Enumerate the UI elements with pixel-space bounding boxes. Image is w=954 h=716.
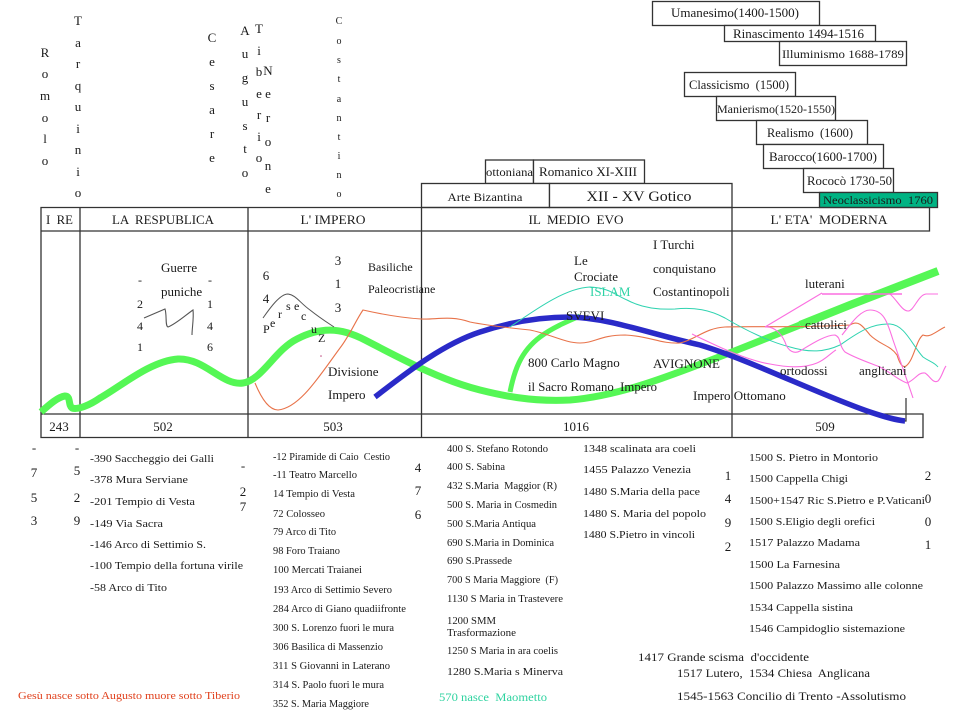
empire monuments list: 98 Foro Traiano: [273, 546, 340, 557]
Guerre puniche squiggle: [144, 309, 193, 335]
modern monuments list: 1500 S.Eligio degli orefici: [749, 516, 875, 528]
art movement boxes, upper group: Umanesimo(1400-1500): [671, 5, 799, 20]
period headings: L' ETA' MODERNA: [770, 212, 888, 227]
religious events notes: 1545-1563 Concilio di Trento -Assolutismo: [677, 689, 906, 703]
empire monuments list: 314 S. Paolo fuori le mura: [273, 680, 385, 691]
republic monuments list: -58 Arco di Tito: [90, 582, 168, 594]
republic monuments list: -201 Tempio di Vesta: [90, 496, 195, 508]
medieval churches list: 1280 S.Maria s Minerva: [447, 666, 563, 678]
late medieval and renaissance works: [583, 443, 707, 541]
art movement boxes, lower group: Barocco(1600-1700): [769, 149, 877, 164]
period durations: 243: [49, 419, 69, 434]
label: Persecuzioni: 313: [335, 253, 341, 315]
art movement boxes, lower group: [684, 72, 938, 208]
period headings: I RE: [46, 212, 73, 227]
labels: confessions: [780, 276, 907, 378]
ruler names in vertical lettering: Tarquinio: [74, 13, 82, 200]
small orange dot: [320, 355, 322, 357]
modern monuments list: 1534 Cappella sistina: [749, 602, 853, 614]
empire monuments list: -12 Piramide di Caio Cestio: [273, 452, 390, 463]
label: Guerre puniche: puniche: [161, 284, 202, 299]
label: Guerre puniche: -241: [137, 273, 143, 354]
label: I Turchi: I Turchi: [653, 237, 695, 252]
art movement boxes, upper group: [652, 2, 906, 66]
label: Persecuzioni: PersecuZ: [263, 299, 325, 345]
period durations: 503: [323, 419, 343, 434]
empire monuments list: 14 Tempio di Vesta: [273, 489, 356, 500]
medieval churches list: 700 S Maria Maggiore (F): [447, 575, 558, 586]
medieval churches list: 690 S.Prassede: [447, 556, 513, 567]
black end tick: [895, 398, 906, 421]
late medieval and renaissance works: 1480 S.Pietro in vincoli: [583, 529, 695, 541]
modern monuments list: 1500+1547 Ric S.Pietro e P.Vaticani: [749, 495, 925, 507]
label: Le Crociate: Le: [574, 253, 588, 268]
medieval churches list: 690 S.Maria in Dominica: [447, 538, 555, 549]
label: Basiliche Paleocristiane: Paleocristiane: [368, 282, 435, 296]
period durations: 509: [815, 419, 835, 434]
labels: confessions: anglicani: [859, 363, 907, 378]
modern monuments list: 1500 Cappella Chigi: [749, 473, 848, 485]
label: ISLAM: ISLAM: [590, 284, 631, 299]
republic monuments list: -390 Saccheggio dei Galli: [90, 453, 214, 465]
art movement boxes, upper group: Illuminismo 1688-1789: [782, 47, 904, 61]
label: Avignone: AVIGNONE: [653, 356, 720, 371]
empire start and end dates: [240, 458, 422, 522]
label: Carlo Magno: [528, 355, 657, 394]
empire monuments list: 311 S Giovanni in Laterano: [273, 661, 390, 672]
modern monuments list: 1500 S. Pietro in Montorio: [749, 452, 879, 464]
period durations: [49, 419, 835, 434]
ruler names in vertical lettering: [40, 13, 343, 200]
late medieval and renaissance works: 1480 S. Maria del popolo: [583, 508, 707, 520]
art movement boxes, lower group: Rococò 1730-50: [807, 173, 892, 188]
empire monuments list: 100 Mercati Traianei: [273, 565, 362, 576]
labels: confessions: ortodossi: [780, 363, 828, 378]
medieval churches list: 500 S. Maria in Cosmedin: [447, 500, 557, 511]
art movement boxes, lower group: Neoclassicismo 1760: [823, 193, 933, 207]
medieval churches list: Trasformazione: [447, 628, 517, 639]
modern monuments list: 1546 Campidoglio sistemazione: [749, 623, 905, 635]
ruler names in vertical lettering: Nerone: [263, 63, 273, 196]
medieval art boxes: Romanico XI-XIII: [539, 164, 637, 179]
label: Divisione Impero: Divisione: [328, 364, 379, 379]
label: Guerre puniche: [137, 260, 213, 354]
label: Impero Ottomano: Impero Ottomano: [693, 388, 786, 403]
empire monuments list: 352 S. Maria Maggiore: [273, 699, 370, 710]
modern age start and end dates: 2001: [925, 468, 931, 552]
period headings: [46, 212, 888, 227]
ruler names in vertical lettering: Costantino: [336, 16, 343, 200]
labels: confessions: luterani: [805, 276, 845, 291]
republic monuments list: -100 Tempio della fortuna virile: [90, 560, 243, 572]
cyan curve: [510, 287, 938, 367]
timeline table: [41, 208, 930, 438]
pink curves: [692, 293, 946, 398]
empire monuments list: 72 Colosseo: [273, 509, 325, 520]
late medieval and renaissance works: 1348 scalinata ara coeli: [583, 443, 696, 455]
art movement boxes, lower group: Realismo (1600): [767, 125, 853, 140]
label: Persecuzioni: [263, 253, 341, 345]
art movement boxes, lower group: Classicismo (1500): [689, 77, 789, 92]
label: SVEVI: SVEVI: [566, 308, 604, 323]
note: Gesù: Gesù nasce sotto Augusto muore sotto Tiberio: [18, 690, 241, 702]
modern age start and end dates: 1492: [725, 468, 732, 554]
modern age start and end dates: [725, 468, 931, 554]
modern monuments list: 1500 La Farnesina: [749, 559, 840, 571]
label: Persecuzioni: 64: [263, 268, 270, 306]
republic monuments list: -146 Arco di Settimio S.: [90, 539, 206, 551]
orange curve: [255, 310, 945, 410]
medieval art boxes: XII - XV Gotico: [586, 189, 692, 205]
label: I Turchi: [653, 237, 730, 299]
label: Carlo Magno: il Sacro Romano Impero: [528, 379, 657, 394]
empire monuments list: 193 Arco di Settimio Severo: [273, 585, 392, 596]
empire start and end dates: -27: [240, 458, 247, 514]
label: I Turchi: conquistano: [653, 261, 716, 276]
label: Le Crociate: [574, 253, 618, 284]
period headings: LA RESPUBLICA: [112, 212, 215, 227]
ruler names in vertical lettering: Romolo: [40, 45, 50, 168]
kings dates: -529: [74, 440, 80, 528]
kings dates: [31, 440, 80, 528]
empire monuments list: 300 S. Lorenzo fuori le mura: [273, 623, 395, 634]
label: Carlo Magno: 800 Carlo Magno: [528, 355, 620, 370]
period durations: 502: [153, 419, 173, 434]
modern monuments list: [749, 452, 925, 635]
empire monuments list: -11 Teatro Marcello: [273, 470, 357, 481]
empire monuments list: 306 Basilica di Massenzio: [273, 642, 383, 653]
religious events notes: 1517 Lutero, 1534 Chiesa Anglicana: [677, 666, 871, 680]
art movement boxes, lower group: Manierismo(1520-1550): [717, 102, 835, 116]
medieval churches list: 1250 S Maria in ara coelis: [447, 646, 558, 657]
late medieval and renaissance works: 1455 Palazzo Venezia: [583, 464, 691, 476]
republic monuments list: [90, 453, 243, 594]
modern monuments list: 1500 Palazzo Massimo alle colonne: [749, 580, 923, 592]
medieval churches list: 400 S. Stefano Rotondo: [447, 444, 548, 455]
label: Basiliche Paleocristiane: [368, 260, 435, 296]
empire monuments list: 79 Arco di Tito: [273, 527, 336, 538]
green curve: Rome and Christianity: [41, 271, 938, 412]
empire start and end dates: 476: [415, 460, 422, 522]
label: Le Crociate: Crociate: [574, 269, 618, 284]
label: Divisione Impero: Impero: [328, 387, 366, 402]
period durations: 1016: [563, 419, 590, 434]
religious events notes: 1417 Grande scisma d'occidente: [638, 650, 809, 664]
medieval churches list: 400 S. Sabina: [447, 462, 506, 473]
label: I Turchi: Costantinopoli: [653, 284, 730, 299]
medieval churches list: 1130 S Maria in Trastevere: [447, 594, 564, 605]
medieval churches list: 1200 SMM: [447, 616, 496, 627]
note: Maometto: 570 nasce Maometto: [439, 690, 547, 704]
ruler names in vertical lettering: Augusto: [240, 23, 250, 180]
medieval churches list: [447, 444, 564, 678]
period headings: L' IMPERO: [300, 212, 366, 227]
empire monuments list: 284 Arco di Giano quadiifronte: [273, 604, 407, 615]
republic monuments list: -378 Mura Serviane: [90, 474, 188, 486]
period headings: IL MEDIO EVO: [528, 212, 624, 227]
modern monuments list: 1517 Palazzo Madama: [749, 537, 860, 549]
blue curve: [375, 317, 905, 421]
kings dates: -753: [31, 440, 38, 528]
Persecuzioni curve: [263, 294, 334, 327]
medieval art boxes: [422, 160, 732, 208]
medieval art boxes: ottoniana: [486, 165, 534, 179]
empire monuments list: [273, 452, 407, 710]
late medieval and renaissance works: 1480 S.Maria della pace: [583, 486, 700, 498]
label: Guerre puniche: -146: [207, 273, 213, 354]
labels: confessions: cattolici: [805, 317, 847, 332]
medieval churches list: 432 S.Maria Maggior (R): [447, 481, 557, 492]
medieval churches list: 500 S.Maria Antiqua: [447, 519, 537, 530]
label: Guerre puniche: Guerre: [161, 260, 197, 275]
religious events notes: [638, 650, 906, 703]
medieval art boxes: Arte Bizantina: [448, 190, 523, 204]
ruler names in vertical lettering: Tiberio: [255, 21, 263, 165]
label: Basiliche Paleocristiane: Basiliche: [368, 260, 413, 274]
ruler names in vertical lettering: Cesare: [208, 30, 216, 165]
art movement boxes, upper group: Rinascimento 1494-1516: [733, 26, 864, 41]
republic monuments list: -149 Via Sacra: [90, 518, 163, 530]
label: Divisione Impero: [328, 364, 379, 402]
